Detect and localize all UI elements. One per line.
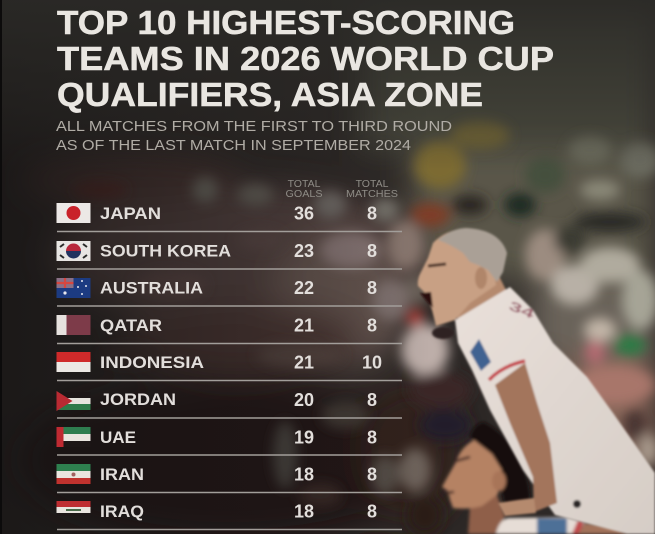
player celebrating, upper (418, 228, 655, 534)
subtitle: AS OF THE LAST MATCH IN SEPTEMBER 2024 (56, 138, 411, 154)
row: Iran: IRAN (100, 466, 144, 484)
column header: total matches: MATCHES (346, 188, 398, 200)
column header: total matches (346, 178, 398, 200)
row: Australia: 22 (294, 278, 314, 298)
flag: Iraq (56, 501, 90, 516)
title (57, 4, 554, 113)
row: Iraq: 8 (367, 502, 377, 522)
subtitle: ALL MATCHES FROM THE FIRST TO THIRD ROUND (56, 119, 452, 135)
row: Australia (56, 278, 402, 306)
column header: total goals: GOALS (286, 188, 322, 200)
player upper: jersey button (573, 500, 581, 508)
player upper: lower forearm (498, 498, 536, 516)
row: UAE: 8 (367, 428, 377, 448)
player upper: beard (432, 327, 454, 339)
player upper: shaved hair (438, 228, 507, 282)
row: Japan: 8 (367, 204, 377, 224)
player upper: sleeve badge (470, 339, 491, 371)
player lower: neck (468, 495, 505, 534)
player lower: brow and mouth (446, 457, 470, 493)
row: South Korea: SOUTH KOREA (100, 242, 231, 260)
row: Iran (56, 464, 402, 492)
flag: Qatar (56, 315, 90, 335)
title: TOP 10 HIGHEST-SCORING (57, 4, 515, 41)
player lower: face (442, 440, 502, 509)
player upper: arm (495, 363, 557, 512)
row: Indonesia: INDONESIA (100, 354, 204, 372)
player lower: sleeve badge (537, 518, 567, 534)
title: TEAMS IN 2026 WORLD CUP (57, 40, 554, 77)
player lower: shirt shoulder (496, 517, 585, 534)
row: South Korea: 8 (367, 241, 377, 261)
player lower: hair (470, 422, 530, 506)
row: Jordan (56, 390, 402, 418)
row: Iraq: 18 (294, 502, 314, 522)
player upper: face (418, 228, 496, 326)
row: UAE: UAE (100, 429, 136, 447)
row: Jordan: 8 (367, 390, 377, 410)
row: Jordan: JORDAN (100, 391, 176, 409)
player upper: jersey number: 34 (507, 298, 538, 322)
player lower: ear (492, 471, 506, 491)
row: Indonesia: 21 (294, 352, 314, 372)
row: Australia: 8 (367, 278, 377, 298)
row: Iraq: IRAQ (100, 503, 144, 521)
row: UAE (56, 427, 402, 455)
row: Jordan: 20 (294, 390, 314, 410)
flag: Iran (56, 464, 90, 484)
row: Indonesia (56, 352, 402, 380)
row: Iran: 18 (294, 464, 314, 484)
row: South Korea: 23 (294, 241, 314, 261)
row: Japan: JAPAN (100, 205, 161, 223)
row: Iraq (56, 501, 402, 530)
row: Japan (56, 203, 402, 232)
row: South Korea (56, 241, 402, 269)
flag: Jordan (56, 391, 90, 411)
row: Qatar (56, 315, 402, 344)
row: Qatar: 21 (294, 316, 314, 336)
row: Indonesia: 10 (362, 352, 382, 372)
player celebrating, lower (442, 422, 628, 534)
player upper: sleeve stripes (489, 361, 525, 380)
flag: UAE (56, 427, 90, 447)
row: Japan: 36 (294, 204, 314, 224)
player upper: neck (455, 272, 506, 322)
flag: South Korea (56, 241, 90, 261)
player upper: open mouth (420, 292, 433, 308)
title: QUALIFIERS, ASIA ZONE (57, 76, 483, 113)
row: Australia: AUSTRALIA (100, 280, 203, 298)
flag: Australia (56, 278, 90, 298)
row: Iran: 8 (367, 464, 377, 484)
row: UAE: 19 (294, 428, 314, 448)
flag: Indonesia (56, 352, 90, 372)
column header: total goals (286, 178, 322, 200)
row: Qatar: 8 (367, 316, 377, 336)
player upper: jersey (455, 287, 655, 534)
column header: total matches: TOTAL (356, 178, 389, 190)
player upper: brow (428, 264, 446, 266)
row: Qatar: QATAR (100, 317, 162, 335)
table rows (56, 203, 402, 530)
subtitle (56, 119, 452, 154)
column header: total goals: TOTAL (288, 178, 321, 190)
flag: Japan (56, 203, 90, 223)
player lower: sleeve stripe (572, 520, 584, 534)
player lower: forearm (578, 523, 628, 534)
player upper: ear (475, 267, 487, 289)
